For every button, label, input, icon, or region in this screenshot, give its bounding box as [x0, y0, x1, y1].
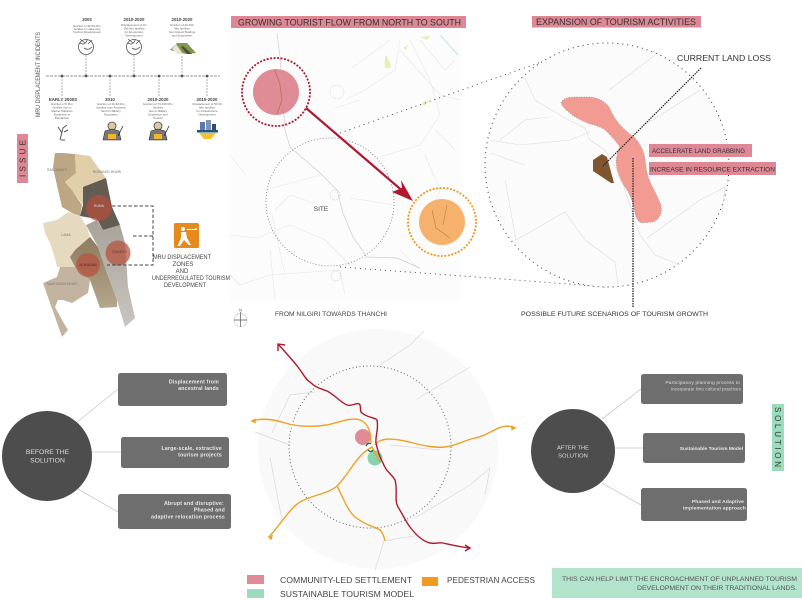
- incident 2010-2020 bottom: families: [153, 106, 163, 110]
- incident 2015-2020: Mru families: [199, 106, 215, 110]
- box: phased implementation: Phased and Adaptive: [692, 499, 744, 505]
- box: abrupt relocation: [118, 494, 231, 529]
- caption: FROM NILGIRI TOWARDS THANCHI: [275, 311, 387, 318]
- text: Mru displacement zones: DEVELOPMENT: [164, 283, 206, 289]
- icon: hiker on orange sign: [174, 223, 199, 248]
- text: Mru displacement zones: ZONES: [173, 262, 193, 268]
- legend: community-led settlement: [247, 575, 412, 585]
- incident 2010-2020 top: Displacement of 10-: [121, 23, 147, 27]
- land loss projection area: [561, 97, 661, 223]
- box: extractive tourism: [121, 437, 229, 468]
- label: issue: ISSUE: [18, 140, 28, 177]
- timeline axis label: MRU DISPLACEMENT INCIDENTS: [35, 32, 42, 117]
- region labels: LAMA: [61, 233, 71, 237]
- tourist road: [278, 344, 470, 551]
- label: issue: [17, 134, 28, 183]
- box: abrupt relocation: Phased and: [194, 508, 225, 514]
- leader: future scenarios: [632, 158, 634, 307]
- incident 2015-2020: Development: [198, 112, 216, 116]
- box: participatory planning: [641, 374, 743, 404]
- text: Mru displacement zones: [152, 255, 230, 289]
- callout: conclusion: [552, 568, 802, 598]
- box: sustainable tourism model: Sustainable Tourism Model: [680, 446, 744, 452]
- panel: after the solution: [531, 374, 747, 521]
- label: possible future scenarios: POSSIBLE FUTURE SCENARIOS OF TOURISM GROWTH: [521, 311, 708, 318]
- label: current land loss: CURRENT LAND LOSS: [677, 53, 771, 63]
- region labels: [46, 168, 127, 286]
- icon: globe with hands: [78, 39, 94, 54]
- incident early 2000s: Eviction of 5 Mru: [51, 102, 73, 106]
- panel: timeline of Mru displacement incidents: [35, 17, 222, 140]
- icon: north arrow: N: [239, 308, 242, 312]
- icon: globe with hands: [126, 39, 142, 54]
- incident 2010-2020 right: from Resort Building: [169, 30, 195, 34]
- box: phased implementation: [641, 488, 747, 521]
- incident 2010-2020 top: Development: [125, 34, 143, 38]
- icon: city and gear: [197, 120, 218, 139]
- dashed connector from zones to tourism icon: [107, 206, 153, 265]
- legend: pedestrian access: [422, 576, 535, 586]
- topographic base circle: [255, 329, 498, 570]
- incident 2010-2020 right: [169, 17, 195, 38]
- topographic base map: [230, 30, 461, 302]
- icon: north arrow: [234, 308, 247, 327]
- heading: EXPANSION OF TOURISM ACTIVITIES: [536, 17, 696, 27]
- incident 2010: Eviction of 10-30 Mru: [97, 102, 125, 106]
- green movement arrows: [366, 443, 373, 452]
- box: extractive tourism: Large-scale, extractive: [161, 446, 222, 452]
- region: Alikadam: [70, 237, 117, 308]
- connector lines: [76, 389, 121, 512]
- icon: soldier: [103, 122, 123, 140]
- box: abrupt relocation: Abrupt and disruptive:: [164, 501, 224, 507]
- incident 2003: Eviction of 30-50 Mru: [73, 24, 101, 28]
- icon: landscape: [170, 43, 196, 54]
- box: displacement: Displacement from: [169, 380, 219, 386]
- incident 2010-2020 right: 2010-2020: [172, 17, 193, 22]
- region: Naikhongchhari: [43, 267, 90, 337]
- before circle: [2, 411, 92, 501]
- site circle: [266, 138, 394, 266]
- legend: sustainable tourism model: [247, 589, 415, 599]
- after circle: SOLUTION: [558, 454, 588, 460]
- panel: proposed site plan: [252, 329, 515, 570]
- incident 2010-2020 bottom: [144, 97, 173, 120]
- region labels: ROWANGCHHARI: [93, 170, 121, 174]
- incident 2010-2020 bottom: Expansion and: [148, 112, 168, 116]
- map: Bandarban upazilas: [43, 153, 135, 337]
- incident 2010-2020 top: for Ecotourism: [125, 30, 144, 34]
- zoomed site circle: [485, 43, 729, 287]
- incident 2010: land for Military: [101, 109, 121, 113]
- incident 2015-2020: for Infrastructure: [196, 109, 218, 113]
- legend: pedestrian access: PEDESTRIAN ACCESS: [447, 576, 535, 585]
- after circle: [531, 409, 615, 493]
- incident 2010-2020 right: and Ecotourism: [172, 34, 193, 38]
- region: Lama: [43, 212, 90, 267]
- incident 2010: families from Ancestral: [96, 106, 126, 110]
- region labels: THANCHI: [111, 250, 127, 254]
- box: sustainable tourism model: [643, 433, 745, 463]
- incident 2010-2020 bottom: 2010-2020: [148, 97, 169, 102]
- incident 2010-2020 top: 100 Mru families: [123, 26, 145, 30]
- displacement zones: [76, 195, 130, 277]
- incident early 2000s: [49, 97, 77, 120]
- label: solution: [772, 404, 784, 471]
- incident 2003: Tourism Development: [73, 30, 101, 34]
- incident 2010-2020 right: Mru families: [174, 26, 190, 30]
- dotted site boundary: [289, 366, 451, 528]
- icon: cut branch: [58, 125, 68, 140]
- box: participatory planning: Participatory planning process to: [665, 380, 740, 386]
- incident 2010-2020 top: [121, 17, 147, 38]
- region labels: ALIKADAM: [79, 263, 97, 267]
- label: solution: SOLUTION: [773, 407, 782, 467]
- panel: growing tourist flow map: [230, 16, 607, 327]
- box: displacement: [118, 373, 227, 406]
- callout: conclusion: THIS CAN HELP LIMIT THE ENCROACHMENT OF UNPLANNED TOURISM: [562, 576, 797, 583]
- region: Rowangchhari: [65, 154, 106, 205]
- incident 2010-2020 right: Eviction of 40-100: [170, 23, 194, 27]
- incident early 2000s: Market Statistics: [51, 109, 73, 113]
- pedestrian access routes: [252, 419, 515, 541]
- incident 2003: [73, 17, 101, 34]
- region labels: RUMA: [94, 204, 105, 208]
- box: displacement: ancestral lands: [178, 386, 219, 392]
- tourist origin circle: [242, 58, 310, 126]
- panel: expansion of tourism activities: [485, 16, 776, 318]
- incident 2010: Expansion: [104, 112, 118, 116]
- incident 2010: 2010: [105, 97, 115, 102]
- incident 2015-2020: 2015-2020: [196, 97, 218, 102]
- box: phased implementation: Implementation approach: [683, 506, 746, 512]
- box: participatory planning: incorporate Mro cultural practices: [671, 386, 742, 392]
- legend: sustainable tourism model: SUSTAINABLE TOURISM MODEL: [280, 590, 415, 599]
- incident 2010-2020 bottom: Eviction of 70-100 Mru: [144, 102, 173, 106]
- timeline axis: [46, 55, 220, 97]
- panel: before the solution: [2, 373, 231, 529]
- region: Ruma: [80, 178, 120, 230]
- box: abrupt relocation: adaptive relocation process: [151, 514, 225, 520]
- incident 2010-2020 top: 2010-2020: [124, 17, 145, 22]
- label: increase in resource extraction: INCREASE IN RESOURCE EXTRACTION: [650, 166, 775, 174]
- incident 2010: [96, 97, 126, 116]
- incident early 2000s: families due to: [53, 106, 72, 110]
- before circle: SOLUTION: [30, 458, 65, 464]
- incident 2003: 2003: [82, 17, 92, 22]
- region labels: NAIKHONGCHHARI: [46, 282, 78, 286]
- incident 2015-2020: [193, 97, 222, 116]
- region labels: RANGAMATI: [47, 168, 67, 172]
- leader: current land loss: [603, 68, 701, 166]
- before circle: BEFORE THE: [26, 449, 70, 456]
- dotted zoom guide lines: [340, 45, 607, 287]
- incident 2010-2020 bottom: Tourism: [153, 116, 164, 120]
- region: Rangamati side: [53, 153, 82, 216]
- tourist destination circle: [408, 188, 476, 256]
- icon: soldier: [149, 122, 169, 140]
- arrow: north to south flow: [306, 108, 413, 201]
- incident 2015-2020: Displacement of 50-60: [193, 102, 222, 106]
- community-led settlement marker: [355, 429, 371, 445]
- text: Mru displacement zones: MRU DISPLACEMENT: [153, 255, 211, 261]
- text: Mru displacement zones: UNDERREGULATED TOURISM: [152, 276, 230, 282]
- legend: [247, 575, 535, 599]
- after circle: AFTER THE: [557, 446, 589, 452]
- region: Thanchi: [86, 220, 135, 327]
- label: increase in resource extraction: [649, 162, 776, 175]
- text: Mru displacement zones: AND: [176, 269, 189, 275]
- heading: GROWING TOURIST FLOW FROM NORTH TO SOUTH: [238, 18, 461, 28]
- incident early 2000s: Expansion in: [54, 112, 71, 116]
- callout: conclusion: DEVELOPMENT ON THEIR TRADITIONAL LANDS.: [637, 585, 797, 592]
- site circle: SITE: [314, 206, 329, 213]
- legend: community-led settlement: COMMUNITY-LED SETTLEMENT: [280, 576, 412, 585]
- incident 2010-2020 bottom: due to Military: [149, 109, 168, 113]
- sustainable tourism marker: [368, 450, 382, 466]
- connector lines: [602, 389, 643, 505]
- label: accelerate land grabbing: [649, 144, 752, 157]
- current land loss area: [593, 154, 614, 183]
- box: extractive tourism: tourism projects: [178, 452, 222, 458]
- incident early 2000s: Bandarban: [55, 116, 69, 120]
- incident early 2000s: EARLY 2000S: [49, 97, 77, 102]
- label: accelerate land grabbing: ACCELERATE LAND GRABBING: [652, 148, 745, 155]
- incident 2003: families to make way: [74, 27, 101, 31]
